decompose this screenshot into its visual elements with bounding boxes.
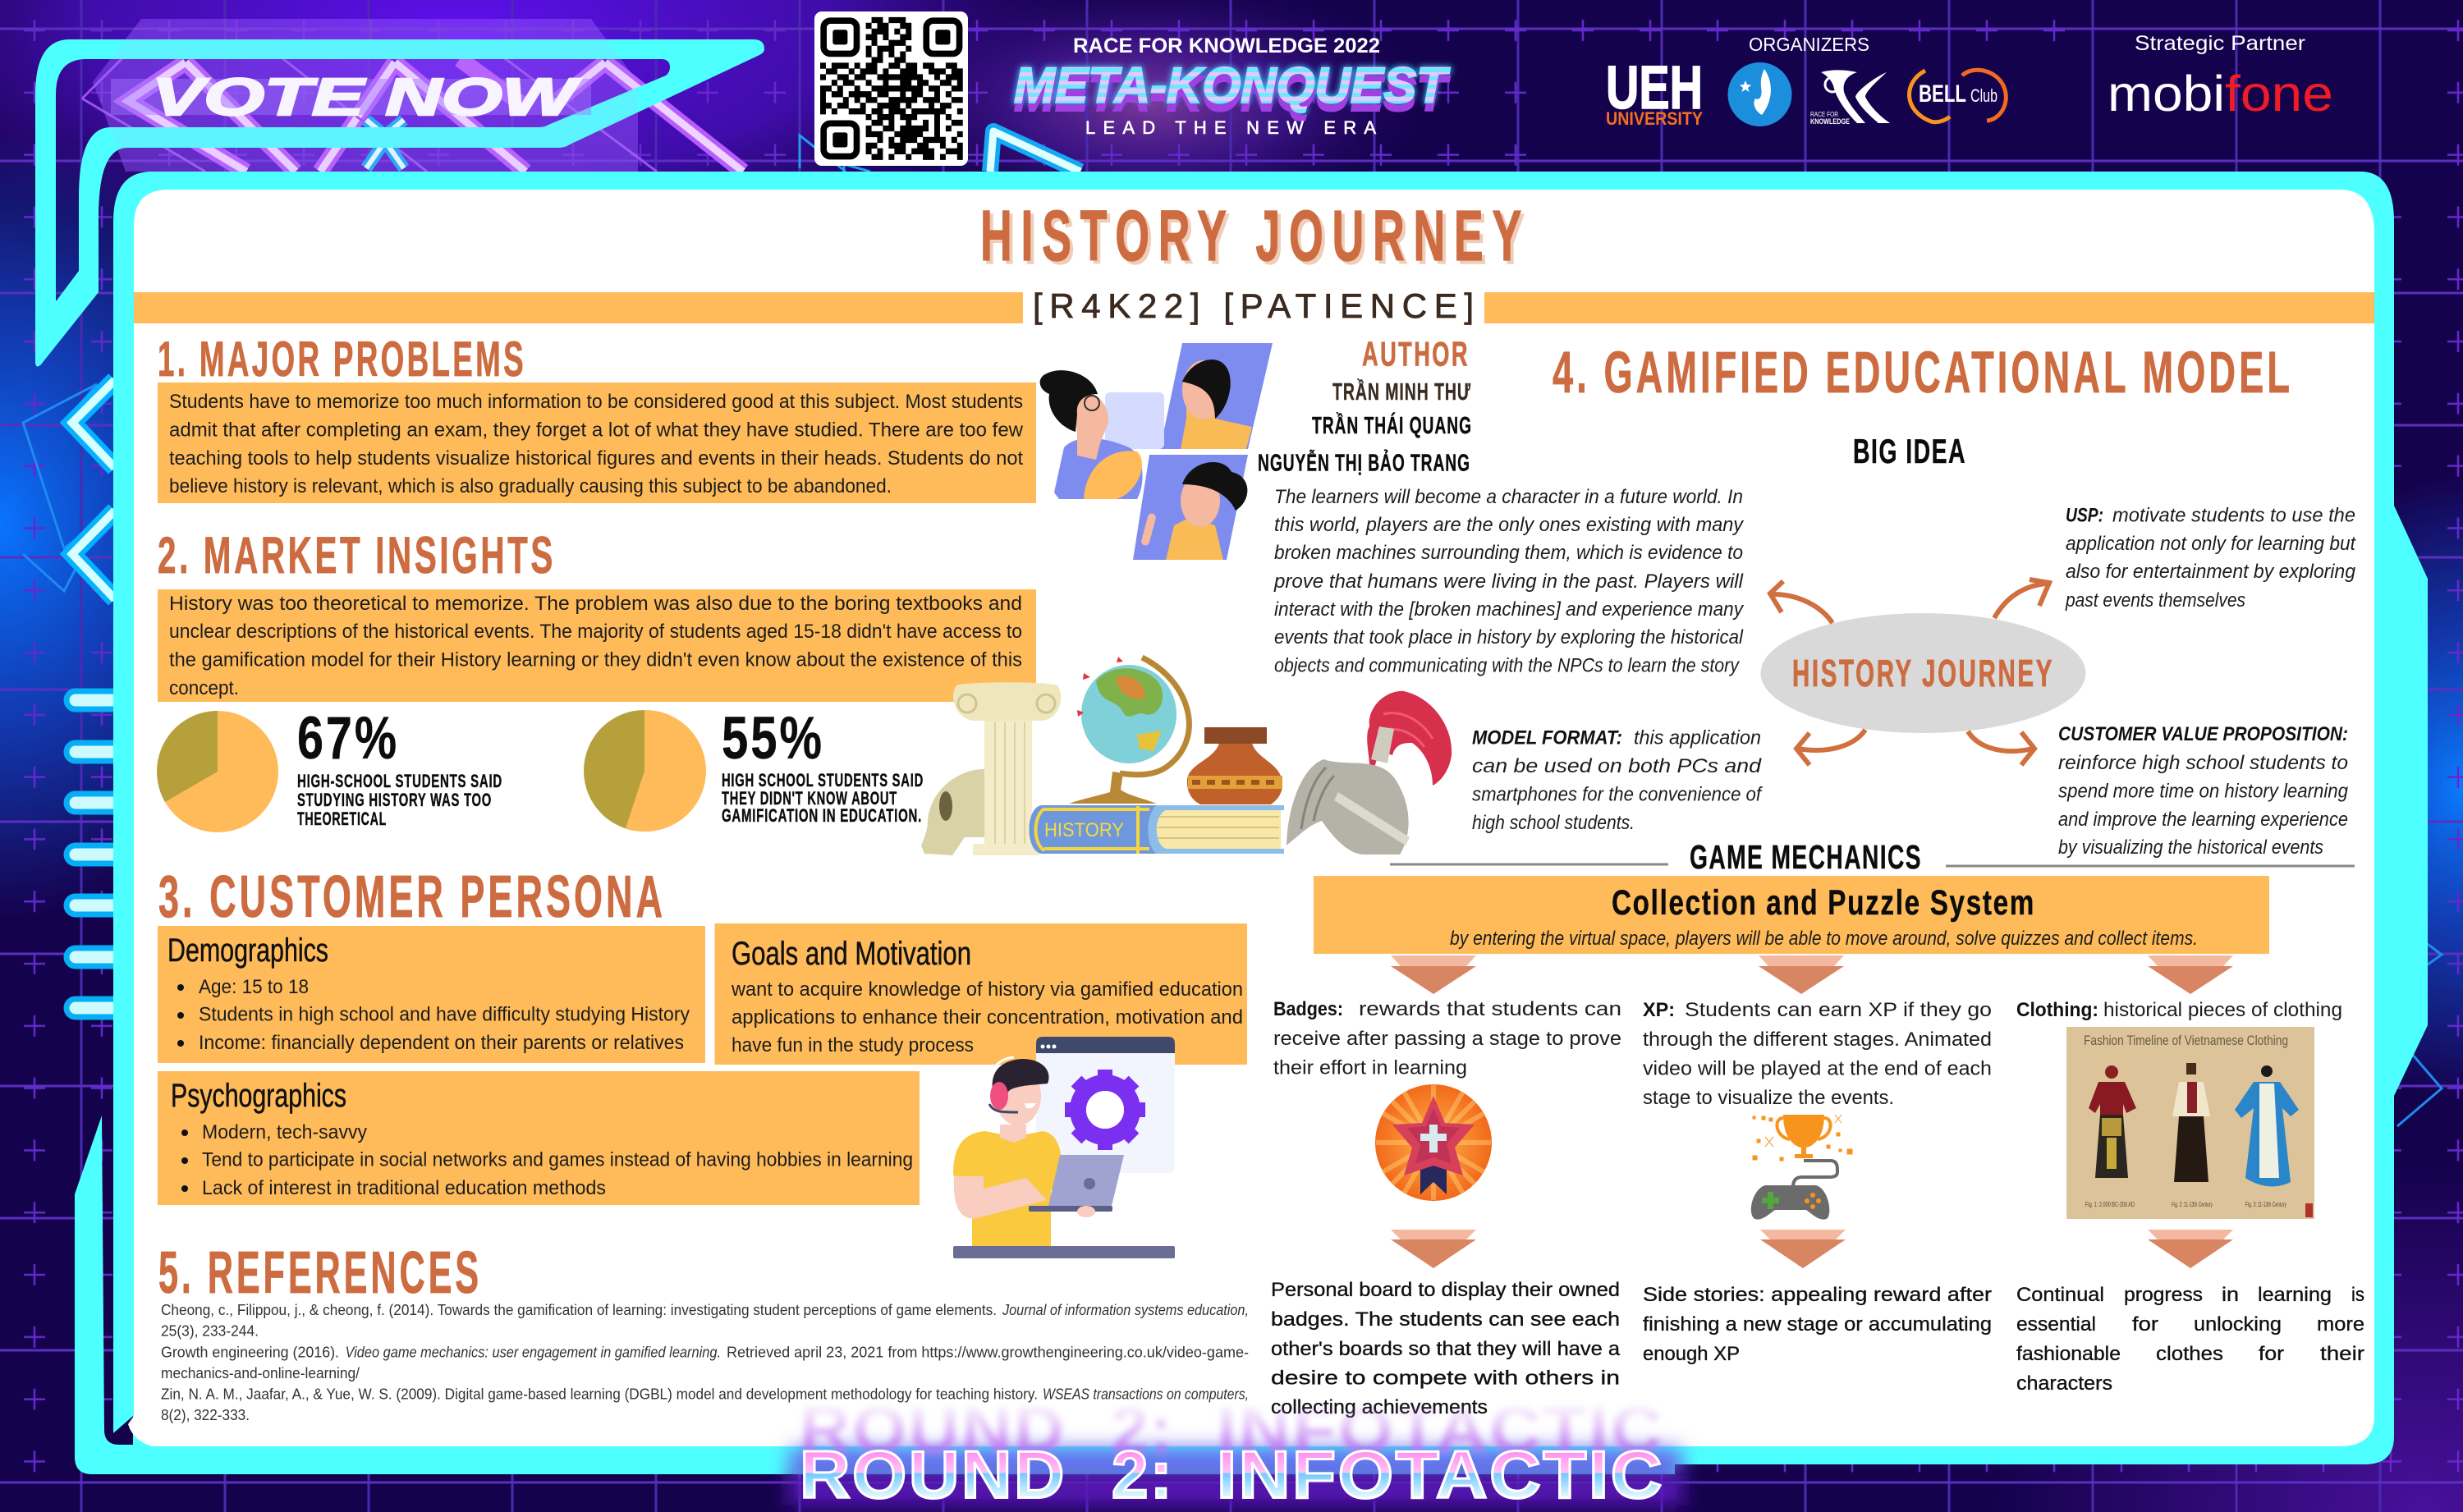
text box: [158, 589, 1036, 702]
personal board text: Personal board to display their owned: [1271, 1279, 1620, 1301]
logo: BELL club: [1910, 70, 2006, 122]
heading: 2. MARKET INSIGHTS: [158, 527, 556, 584]
app window: [1036, 1037, 1175, 1173]
USP note: [2065, 504, 2356, 612]
organizers heading: ORGANIZERS: [1749, 34, 1869, 55]
personal board text: badges. The students can see each: [1271, 1308, 1620, 1331]
text box: believe history is relevant, which is also gradually causing this subject to be abandoned.: [169, 475, 892, 497]
reference list: Zin, N. A. M., Jaafar, A., & Yue, W. S. (2009). Digital game-based learning (DGBL) model and development methodology for teaching history.: [161, 1386, 1038, 1402]
badges column text: [1273, 998, 1621, 1079]
side stories text: Side stories: appealing reward after: [1643, 1284, 1992, 1306]
collection and puzzle system banner: [1314, 876, 2269, 954]
customer value proposition note: [2058, 723, 2349, 859]
subtitle band: [134, 286, 2374, 325]
text box: [158, 383, 1036, 503]
title: HISTORY JOURNEY: [980, 196, 1530, 276]
card: goals and motivation: applications to enhance their concentration, motivation and: [732, 1006, 1243, 1029]
card: psychographics: Lack of interest in traditional education methods: [202, 1177, 606, 1199]
title text: 2:: [1112, 1438, 1174, 1512]
side stories text: [1643, 1284, 1992, 1365]
big idea paragraph: objects and communicating with the NPCs to learn the story: [1274, 655, 1741, 677]
customer value proposition note: spend more time on history learning: [2058, 780, 2349, 803]
left side neon pills: [67, 691, 124, 1017]
right side thin chevrons: [2381, 940, 2442, 1126]
customer value proposition note: and improve the learning experience: [2058, 809, 2348, 831]
title reflection: ROUND: [800, 1393, 1066, 1468]
personal board text: [1271, 1279, 1621, 1418]
arrow: down to clothing: [2148, 955, 2233, 994]
central ellipse: HISTORY JOURNEY: [1792, 652, 2054, 694]
logo: BELL club: Club: [1970, 85, 1997, 106]
XP column text: video will be played at the end of each: [1643, 1058, 1992, 1080]
arrow: down to personal board: [1391, 1230, 1476, 1268]
continual progress text: more: [2317, 1313, 2364, 1336]
central ellipse: [1760, 613, 2085, 733]
badges column text: receive after passing a stage to prove: [1273, 1028, 1621, 1050]
model format note: [1472, 727, 1763, 834]
reference list: 8(2), 322-333.: [161, 1407, 250, 1423]
cyan frame lower-left: [75, 1116, 1675, 1474]
person: [953, 1057, 1062, 1246]
card: psychographics: Modern, tech-savvy: [202, 1121, 367, 1143]
QR code: [814, 11, 968, 166]
globe: [1069, 657, 1189, 804]
collection and puzzle system banner: Collection and Puzzle System: [1612, 883, 2035, 923]
XP column text: [1643, 999, 1992, 1109]
continual progress text: fashionable: [2016, 1343, 2121, 1365]
logo: student association: [1727, 62, 1791, 126]
continual progress text: unlocking: [2194, 1313, 2282, 1336]
XP column text: through the different stages. Animated: [1643, 1029, 1992, 1051]
title reflection: [800, 1393, 1664, 1468]
icon: star badge: [1375, 1084, 1492, 1201]
personal board text: collecting achievements: [1271, 1396, 1488, 1418]
arrow: to USP: [1994, 580, 2049, 618]
logo: mobifone: mobi: [2108, 66, 2225, 121]
controller: [1751, 1185, 1829, 1220]
author credits: [1258, 335, 1472, 476]
title text: ROUND: [800, 1438, 1066, 1512]
white content panel: [128, 190, 2374, 1446]
continual progress text: their: [2320, 1343, 2364, 1365]
model format note: this application: [1634, 727, 1761, 749]
badges column text: their effort in learning: [1273, 1057, 1467, 1079]
book: [1030, 805, 1284, 854]
logo: UEH university: [1606, 53, 1703, 129]
collection and puzzle system banner: by entering the virtual space, players will be able to move around, solve quizzes and collect items.: [1450, 928, 2198, 950]
card: goals and motivation: Goals and Motivation: [732, 936, 971, 972]
pie chart: 67%: [157, 711, 278, 832]
vote now banner: [35, 39, 764, 367]
text box: unclear descriptions of the historical events. The majority of students aged 15-18 didn't have access to: [169, 621, 1022, 643]
captions: Fig. 3: 11-13th Century: [2245, 1201, 2286, 1208]
trophy: [1753, 1115, 1852, 1161]
big idea paragraph: this world, players are the only ones existing with many: [1274, 514, 1745, 536]
text box: teaching tools to help students visualize historical figures and events in their heads. Students do not: [169, 447, 1023, 470]
card: goals and motivation: want to acquire knowledge of history via gamified education: [731, 978, 1243, 1001]
tagline: LEAD THE NEW ERA: [1085, 117, 1376, 138]
author names: TRẦN THÁI QUANG: [1312, 411, 1472, 439]
arrow: down to badges: [1391, 955, 1476, 994]
stat: 67%: THEORETICAL: [297, 809, 387, 829]
vote now text: VOTE NOW: [152, 67, 581, 126]
reference list: [161, 1302, 1249, 1423]
text box: concept.: [169, 677, 239, 699]
big idea paragraph: interact with the [broken machines] and experience many: [1274, 598, 1745, 621]
laptop: [1029, 1155, 1124, 1217]
translucent band: [111, 79, 591, 115]
big idea paragraph: [1273, 486, 1745, 677]
title reflection: INFOTACTIC: [1217, 1393, 1664, 1468]
vase: [1187, 727, 1282, 804]
continual progress text: Continual: [2016, 1284, 2104, 1306]
race for knowledge label: RACE FOR KNOWLEDGE 2022: [1073, 34, 1380, 57]
continual progress text: characters: [2016, 1372, 2112, 1395]
model format note: high school students.: [1472, 812, 1635, 834]
USP note: also for entertainment by exploring: [2066, 561, 2356, 583]
arrow: to model format: [1796, 730, 1865, 765]
text box: Students have to memorize too much information to be considered good at this subject. Most students: [169, 391, 1023, 413]
model format note: MODEL FORMAT:: [1472, 727, 1622, 749]
card: psychographics: Psychographics: [171, 1078, 346, 1114]
reference list: Journal of information systems education,: [1002, 1302, 1249, 1318]
logo: race for knowledge: [1810, 70, 1890, 126]
continual progress text: clothes: [2156, 1343, 2223, 1365]
author names: [1258, 378, 1472, 476]
big idea label: BIG IDEA: [1853, 432, 1966, 470]
card: goals and motivation: have fun in the study process: [732, 1034, 974, 1056]
captions: Fig. 2: 11-13th Century: [2172, 1201, 2213, 1208]
title text: INFOTACTIC: [1217, 1438, 1664, 1512]
card: demographics: Age: 15 to 18: [199, 976, 309, 998]
USP note: past events themselves: [2065, 589, 2245, 612]
USP note: motivate students to use the: [2112, 504, 2355, 527]
stat: 67%: 67%: [297, 705, 399, 772]
figure two: [2172, 1063, 2210, 1182]
skull: [921, 769, 984, 855]
title: HISTORY JOURNEY: [984, 199, 1534, 279]
USP note: USP:: [2066, 504, 2103, 527]
book label: HISTORY: [1044, 819, 1124, 841]
figure three: [2235, 1065, 2299, 1186]
figure one: [2089, 1065, 2136, 1178]
card: goals and motivation: [714, 923, 1247, 1065]
icon: knight helmet: [1287, 691, 1452, 855]
reference list: mechanics-and-online-learning/: [161, 1365, 360, 1381]
logo: mobifone: fone: [2225, 66, 2333, 121]
continual progress text: is: [2351, 1284, 2364, 1306]
captions: [2085, 1201, 2286, 1208]
team tag: [R4K22] [PATIENCE]: [1033, 286, 1474, 325]
arrow: down to side stories: [1760, 1230, 1846, 1268]
stat: 55%: [722, 705, 924, 826]
arrow: to big idea: [1770, 581, 1832, 623]
heading: 1. MAJOR PROBLEMS: [158, 332, 526, 387]
round 2 infotactic title: [788, 1393, 1683, 1512]
logo: BELL club: BELL: [1919, 80, 1966, 108]
pie chart: 55%: [584, 710, 706, 832]
big idea paragraph: broken machines surrounding them, which is evidence to: [1274, 542, 1743, 564]
left side neon chevrons: [23, 380, 144, 599]
game mechanics heading: GAME MECHANICS: [1690, 838, 1922, 876]
meta-konquest logo: META-KONQUEST: [1014, 66, 1451, 121]
gear: [1065, 1070, 1145, 1150]
organizers: [1606, 34, 2006, 129]
reference list: 25(3), 233-244.: [161, 1323, 259, 1340]
section 5: references: [158, 1240, 1249, 1423]
title text: [800, 1438, 1664, 1512]
clothing column text: historical pieces of clothing: [2103, 999, 2342, 1021]
heading: 3. CUSTOMER PERSONA: [158, 864, 666, 930]
author heading: AUTHOR: [1362, 335, 1470, 373]
reference list: Cheong, c., Filippou, j., & cheong, f. (2014). Towards the gamification of learning: investigating student perceptions of game elements.: [161, 1302, 997, 1318]
section 2: market insights: [157, 527, 1036, 832]
model format note: smartphones for the convenience of: [1472, 783, 1763, 805]
personal board text: desire to compete with others in: [1271, 1368, 1620, 1390]
neon chevrons behind the vote banner: [82, 19, 743, 172]
card: demographics: [158, 926, 705, 1063]
reference list: Video game mechanics: user engagement in gamified learning.: [345, 1345, 721, 1361]
logo: UEH university: UEH: [1606, 53, 1703, 121]
reference list: WSEAS transactions on computers,: [1043, 1386, 1249, 1402]
reference list: Retrieved april 23, 2021 from https://www.growthengineering.co.uk/video-game-: [727, 1345, 1249, 1361]
arrow: down to continual progress: [2148, 1230, 2233, 1268]
logo: race for knowledge: RACE FOR: [1810, 111, 1838, 118]
title: [980, 196, 1534, 279]
stat: 55%: 55%: [722, 705, 824, 772]
text box: the gamification model for their History learning or they didn't even know about the existence of this: [169, 648, 1022, 671]
image: fashion timeline of Vietnamese clothing: [2066, 1027, 2314, 1219]
side stories text: finishing a new stage or accumulating: [1643, 1313, 1992, 1336]
title glow: [788, 1448, 1683, 1505]
continual progress text: [2016, 1284, 2364, 1395]
customer value proposition note: reinforce high school students to: [2058, 752, 2348, 774]
logo: mobifone: [2108, 66, 2333, 121]
stat: 55%: HIGH SCHOOL STUDENTS SAID: [722, 770, 924, 790]
strategic partner: [2108, 32, 2333, 121]
continual progress text: progress: [2124, 1284, 2203, 1306]
USP note: application not only for learning but: [2066, 533, 2356, 555]
column: [953, 682, 1061, 855]
meta-konquest logo: META-KONQUEST: [1014, 57, 1451, 113]
title reflection: 2:: [1112, 1393, 1174, 1468]
personal board text: other's boards so that they will have a: [1271, 1338, 1621, 1360]
partner heading: Strategic Partner: [2135, 32, 2305, 55]
stat: 67%: STUDYING HISTORY WAS TOO: [297, 790, 492, 810]
card: demographics: Students in high school and have difficulty studying History: [199, 1003, 690, 1026]
big idea paragraph: prove that humans were living in the past. Players will: [1273, 570, 1744, 593]
arrow: to customer value: [1968, 731, 2034, 765]
XP column text: stage to visualize the events.: [1643, 1087, 1894, 1109]
continual progress text: for: [2132, 1313, 2158, 1336]
continual progress text: for: [2259, 1343, 2284, 1365]
text box: History was too theoretical to memorize. The problem was also due to the boring textbooks and: [169, 593, 1022, 615]
neon triangle beside QR code: [800, 131, 1080, 172]
badges column text: rewards that students can: [1359, 998, 1621, 1020]
card: demographics: Demographics: [167, 932, 328, 969]
big idea paragraph: The learners will become a character in a future world. In: [1274, 486, 1743, 508]
side stories text: enough XP: [1643, 1343, 1740, 1365]
card: demographics: Income: financially dependent on their parents or relatives: [199, 1032, 684, 1054]
clothing column text: Clothing:: [2016, 999, 2098, 1021]
stat: 67%: [297, 705, 502, 829]
reference list: Growth engineering (2016).: [161, 1345, 339, 1361]
XP column text: XP:: [1643, 999, 1675, 1021]
cable: [1793, 1161, 1837, 1187]
stat: 55%: GAMIFICATION IN EDUCATION.: [722, 805, 922, 826]
continual progress text: essential: [2016, 1313, 2096, 1336]
icon: students thinking: [1040, 343, 1273, 560]
customer value proposition note: by visualizing the historical events: [2058, 836, 2323, 859]
stat: 67%: HIGH-SCHOOL STUDENTS SAID: [297, 771, 502, 791]
card: psychographics: Tend to participate in social networks and games instead of having hobbies in learning: [202, 1149, 913, 1171]
continual progress text: in: [2222, 1284, 2239, 1306]
logo: race for knowledge: KNOWLEDGE: [1810, 117, 1850, 126]
section 4: gamified educational model: [1273, 341, 2356, 859]
arrow: down to XP: [1759, 955, 1844, 994]
captions: Fig. 1: 2,000 BC-200 AD: [2085, 1201, 2135, 1208]
badges column text: Badges:: [1273, 998, 1343, 1020]
author names: TRẦN MINH THƯ: [1332, 378, 1471, 405]
model format note: can be used on both PCs and: [1472, 755, 1762, 777]
continual progress text: learning: [2258, 1284, 2332, 1306]
big idea paragraph: events that took place in history by exploring the historical: [1274, 626, 1744, 648]
section 1: major problems: [158, 332, 1036, 503]
author names: NGUYỄN THỊ BẢO TRANG: [1258, 448, 1470, 476]
meta-konquest logo: META-KONQUEST: [1014, 57, 1451, 113]
stat: 55%: THEY DIDN'T KNOW ABOUT: [722, 788, 897, 809]
section 3: customer persona: [158, 864, 1247, 1205]
card: psychographics: [158, 1071, 920, 1205]
text box: admit that after completing an exam, they forget a lot of what they have studied. There are too few: [169, 419, 1024, 442]
XP column text: Students can earn XP if they go: [1685, 999, 1992, 1021]
icon: trophy and game controller: [1751, 1115, 1852, 1220]
banner cyan frame: [35, 39, 764, 367]
logo: UEH university: UNIVERSITY: [1606, 108, 1703, 129]
event title block: [1014, 34, 1451, 138]
customer value proposition note: CUSTOMER VALUE PROPOSITION:: [2058, 723, 2348, 745]
base bar: [953, 1246, 1175, 1258]
icon: antiques column globe book vase: [921, 657, 1284, 855]
icon: support agent with gear window: [953, 1037, 1175, 1258]
timeline title: Fashion Timeline of Vietnamese Clothing: [2084, 1033, 2288, 1048]
heading: 5. REFERENCES: [158, 1240, 482, 1306]
light sheen over banner: [93, 19, 638, 172]
